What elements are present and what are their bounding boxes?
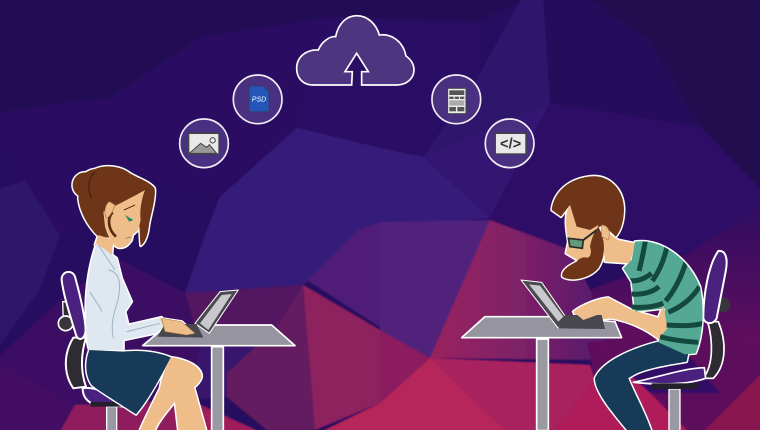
eye, brow and mouth	[124, 205, 135, 238]
hair curl and shirt detail lines	[89, 172, 160, 338]
woman's table and laptop	[143, 290, 295, 430]
glasses	[568, 230, 597, 248]
icon: image circle	[180, 119, 228, 168]
woman	[73, 166, 206, 430]
man	[552, 176, 703, 430]
icon: code circle	[485, 119, 534, 168]
shirt stripes	[623, 240, 703, 342]
man's chair	[633, 251, 731, 430]
icon: PSD file circle: PSD	[252, 97, 266, 104]
cloud upload icon	[297, 16, 414, 85]
woman's chair	[58, 272, 130, 430]
ear	[602, 225, 609, 240]
icon: PSD file circle	[233, 75, 282, 124]
ear	[105, 202, 115, 218]
icon: document layout circle	[432, 75, 481, 124]
man's table and laptop	[462, 280, 622, 430]
icon: code circle: </>	[500, 137, 521, 153]
